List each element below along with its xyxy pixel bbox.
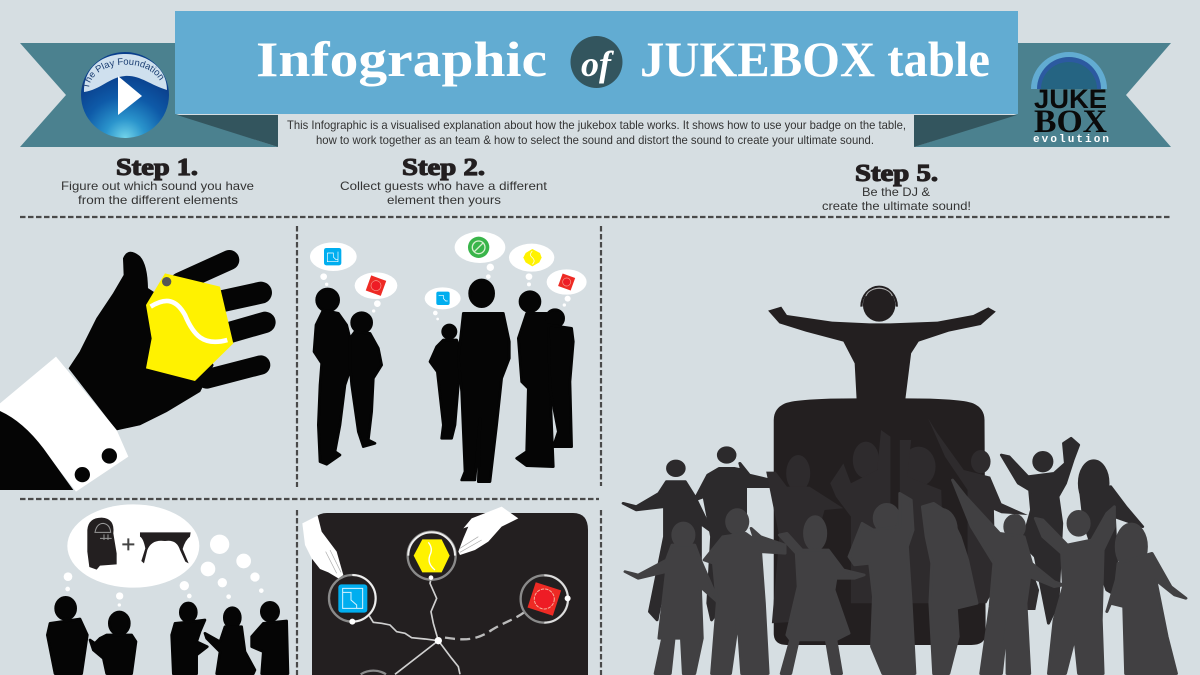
thought bubble	[64, 504, 264, 607]
back row dancers	[623, 438, 1143, 623]
logo: JUKEBOX evolution: BOX	[1034, 104, 1107, 140]
intro text: how to work together as an team & how to select the sound and distort the sound to create your ultimate sound.	[316, 133, 874, 147]
panel: step 4 jukebox table top	[302, 507, 588, 675]
panel: step 1 hand with badge	[0, 252, 265, 492]
left ribbon	[20, 43, 278, 147]
guest silhouettes	[314, 280, 573, 482]
DJ on jukebox table	[768, 287, 996, 645]
panel: step 3 group thinking of jukebox plus table	[47, 504, 288, 674]
plus sign	[122, 538, 134, 550]
logo: The Play Foundation	[81, 52, 169, 138]
icon: yellow element	[523, 249, 542, 266]
partial element ring	[361, 671, 386, 674]
heading: step 1: Figure out which sound you have	[61, 179, 254, 193]
yellow element on table	[408, 532, 456, 580]
heading: step 2: element then yours	[387, 193, 501, 207]
right white hand	[458, 507, 518, 555]
intro text	[287, 118, 906, 147]
icon: red element	[366, 275, 386, 296]
right ribbon	[914, 43, 1171, 147]
heading: step 2: Step 2.	[402, 155, 485, 181]
logo: The Play Foundation: The Play Foundation	[82, 58, 164, 88]
heading: step 1	[61, 155, 254, 207]
panel: step 2 guests with thought bubbles	[310, 232, 587, 482]
logo: JUKEBOX evolution	[1031, 52, 1109, 146]
intro text: This Infographic is a visualised explanation about how the jukebox table works. It shows how to use your badge on the table,	[287, 118, 906, 132]
heading: step 1: from the different elements	[78, 193, 238, 207]
icon: jukebox	[87, 518, 117, 570]
heading: step 5: Step 5.	[855, 161, 938, 187]
heading: step 1: Step 1.	[116, 155, 198, 181]
title: Infographic: Infographic	[256, 31, 547, 87]
heading: step 5	[822, 161, 971, 213]
cuff buttons	[75, 448, 117, 482]
heading: step 5: Be the DJ &	[862, 185, 930, 199]
dancers in front of the table	[766, 418, 1039, 623]
red element on table	[521, 575, 571, 623]
jacket sleeve	[0, 411, 73, 490]
table surface	[312, 513, 588, 675]
title banner	[175, 11, 1018, 114]
icon: table	[140, 532, 191, 563]
group silhouettes	[47, 597, 288, 674]
shirt cuff	[0, 357, 128, 492]
heading: step 2	[340, 155, 548, 207]
thought bubbles	[310, 232, 587, 320]
badge: of	[570, 36, 622, 88]
hand silhouette	[69, 252, 265, 430]
badge: of: of	[581, 44, 614, 84]
icon: blue element	[324, 248, 341, 265]
front row dancers	[625, 480, 1186, 674]
connection hub	[435, 637, 442, 644]
heading: step 5: create the ultimate sound!	[822, 199, 971, 213]
left white hand	[302, 516, 343, 578]
icon: blue element small	[436, 292, 450, 305]
title: JUKEBOX table: JUKEBOX table	[640, 31, 990, 87]
yellow badge	[146, 273, 233, 381]
logo: JUKEBOX evolution: JUKE	[1034, 84, 1107, 114]
logo: JUKEBOX evolution: evolution	[1033, 134, 1109, 146]
blue element on table	[329, 575, 376, 625]
heading: step 2: Collect guests who have a different	[340, 179, 548, 193]
icon: red element small	[558, 273, 575, 291]
icon: green element	[468, 237, 489, 258]
connecting lines	[368, 579, 528, 674]
panel: step 5 DJ and crowd	[623, 287, 1186, 674]
